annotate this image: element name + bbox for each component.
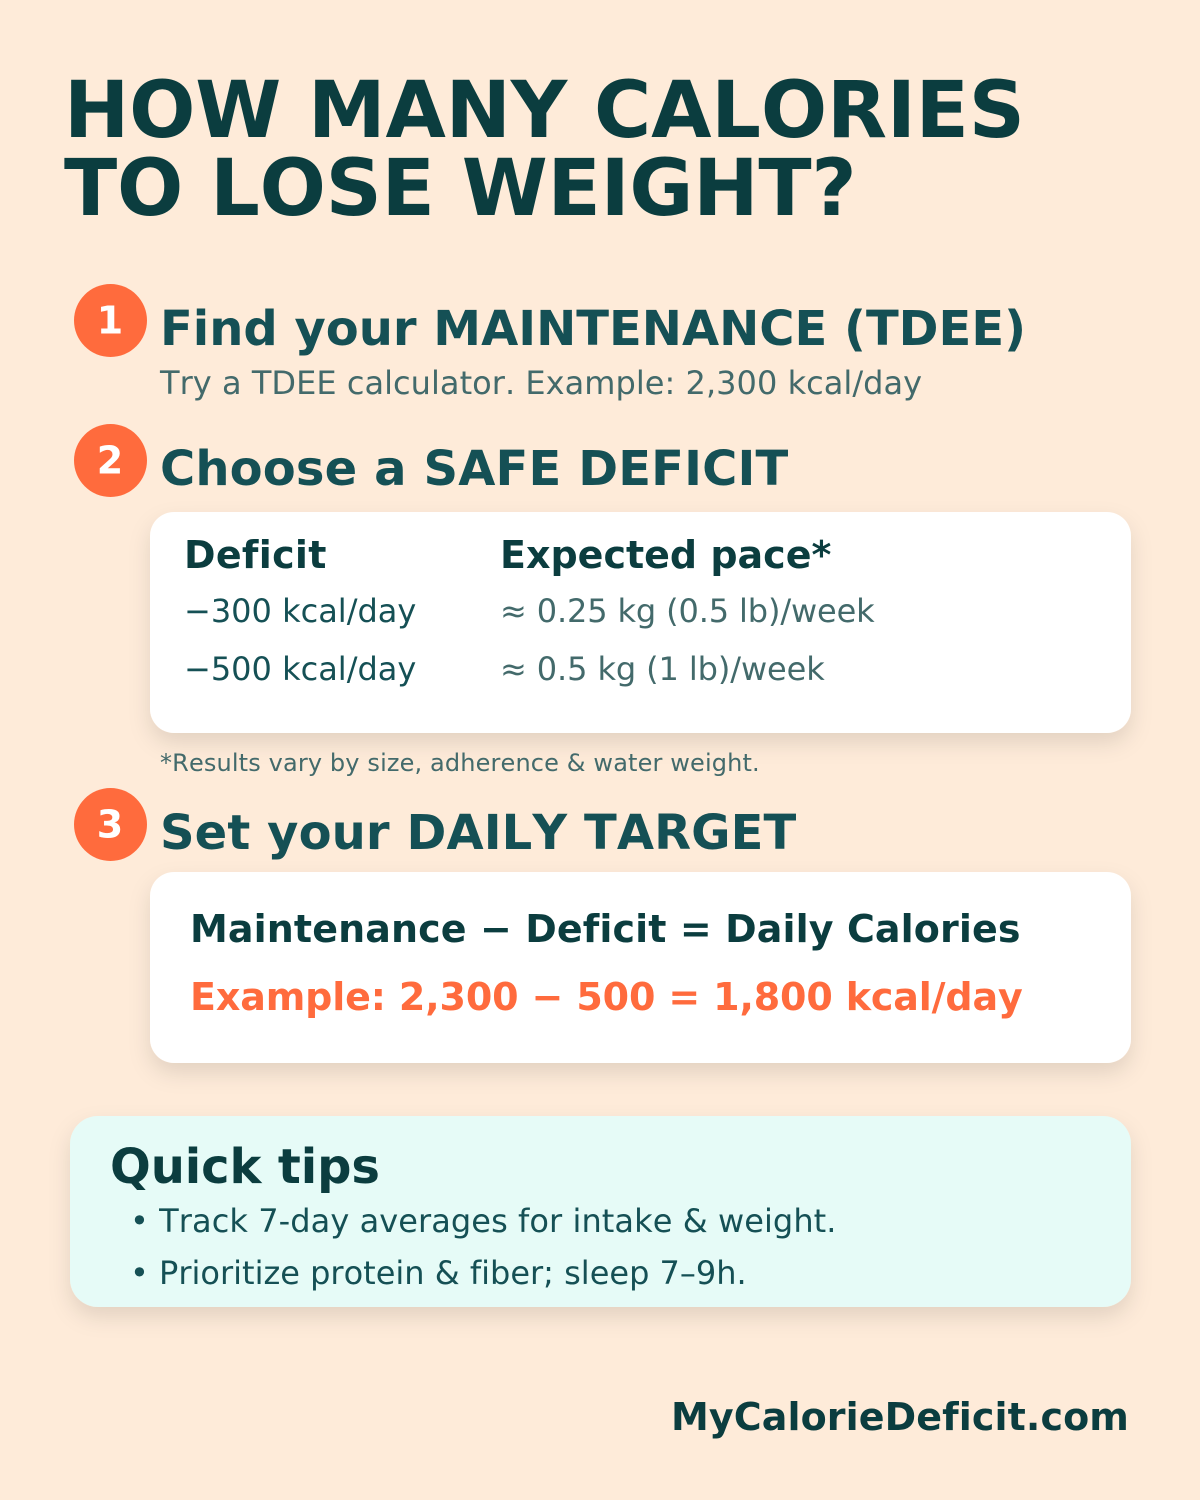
tip 2: • Prioritize protein & fiber; sleep 7–9h. <box>130 1254 747 1292</box>
deficit column: −300 kcal/day <box>184 592 416 630</box>
footnote: *Results vary by size, adherence & water weight. <box>160 749 760 777</box>
step 3 number badge: 3 <box>97 802 123 846</box>
deficit column <box>184 533 416 688</box>
expected pace column: ≈ 0.5 kg (1 lb)/week <box>500 650 825 688</box>
step 2 heading: Choose a SAFE DEFICIT <box>160 441 788 497</box>
step 2 number badge <box>74 424 147 497</box>
panel: deficit table <box>150 512 1131 733</box>
step 1 number badge <box>74 284 147 357</box>
title: HOW MANY CALORIES <box>64 66 1025 156</box>
deficit column: −500 kcal/day <box>184 650 416 688</box>
step 3 heading: Set your DAILY TARGET <box>160 805 797 861</box>
worked example: Example: 2,300 − 500 = 1,800 kcal/day <box>190 975 1023 1019</box>
step 1 description: Try a TDEE calculator. Example: 2,300 kcal/day <box>159 364 922 402</box>
step 2 number badge: 2 <box>97 438 123 482</box>
step 3 number badge <box>74 788 147 861</box>
expected pace column <box>500 533 875 688</box>
quick tips heading: Quick tips <box>110 1139 380 1195</box>
panel: daily target formula <box>150 872 1131 1063</box>
expected pace column: ≈ 0.25 kg (0.5 lb)/week <box>500 592 875 630</box>
title <box>64 66 1025 234</box>
panel: quick tips <box>70 1116 1131 1307</box>
step 2 <box>74 424 1131 777</box>
deficit column: Deficit <box>184 533 327 577</box>
step 1 number badge: 1 <box>97 298 123 342</box>
tip 1: • Track 7-day averages for intake & weight. <box>130 1202 837 1240</box>
formula: Maintenance − Deficit = Daily Calories <box>190 907 1021 951</box>
step 1 <box>74 284 1026 402</box>
step 1 heading: Find your MAINTENANCE (TDEE) <box>160 301 1026 357</box>
expected pace column: Expected pace* <box>500 533 831 577</box>
step 3 <box>74 788 1131 1063</box>
title: TO LOSE WEIGHT? <box>64 144 856 234</box>
website credit: MyCalorieDeficit.com <box>671 1395 1129 1439</box>
